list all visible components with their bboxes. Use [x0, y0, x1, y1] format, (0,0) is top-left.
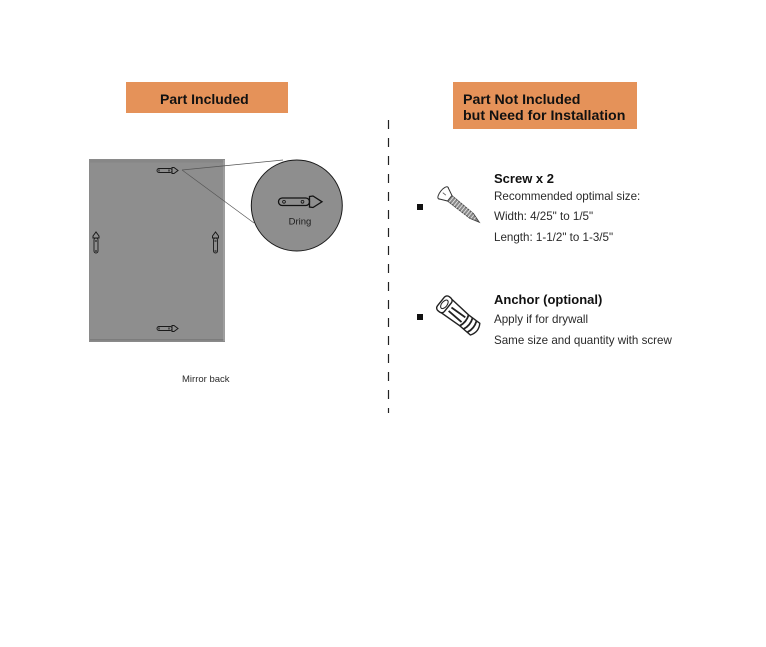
text block: anchor	[494, 292, 672, 347]
D-ring top	[157, 168, 178, 174]
anchor usage: Apply if for drywall	[494, 313, 588, 326]
divider: dashed line	[388, 120, 390, 413]
heading: part included: Part Included	[160, 91, 249, 107]
enlarged D-ring	[278, 196, 322, 208]
heading: part not included	[453, 82, 637, 129]
zoom circle	[251, 160, 342, 251]
label: Dring: Dring	[289, 216, 311, 228]
heading: part included	[126, 82, 288, 113]
bullet: screw	[417, 204, 423, 210]
mirror panel	[90, 160, 224, 342]
anchor title: Anchor (optional)	[494, 292, 602, 307]
anchor quantity: Same size and quantity with screw	[494, 334, 672, 347]
bullet: anchor	[417, 314, 423, 320]
D-ring right	[212, 232, 218, 253]
callout lines	[182, 160, 283, 223]
screw width: Width: 4/25" to 1/5"	[494, 210, 593, 223]
screw length: Length: 1-1/2" to 1-3/5"	[494, 231, 613, 244]
D-ring bottom	[157, 326, 178, 332]
heading: part not included: Part Not Included	[463, 92, 580, 108]
label: mirror back: Mirror back	[182, 374, 230, 385]
D-ring left	[93, 232, 99, 253]
icon: screw	[436, 185, 484, 228]
icon: anchor	[435, 294, 483, 338]
text block: screw	[494, 171, 640, 244]
screw title: Screw x 2	[494, 171, 554, 186]
heading: part not included: but Need for Installation	[463, 108, 625, 124]
screw recommended size: Recommended optimal size:	[494, 190, 640, 203]
